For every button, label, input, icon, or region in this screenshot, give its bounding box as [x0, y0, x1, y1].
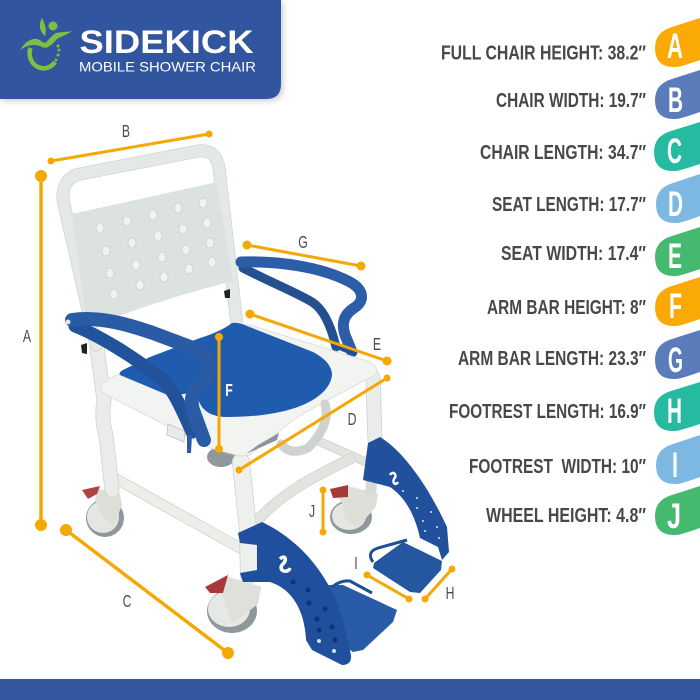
front caster [205, 575, 259, 633]
spec row H [449, 382, 700, 431]
dimension letters [23, 122, 454, 612]
rear seat wheel [207, 447, 235, 467]
seat bracket [167, 424, 185, 442]
dimension letters: C [123, 592, 131, 612]
spec row J: J [667, 497, 681, 536]
header banner [0, 0, 281, 99]
rear left caster [82, 486, 124, 537]
spec row E [501, 227, 700, 276]
footer bar [0, 679, 700, 700]
dimension lines [35, 130, 456, 659]
dimension letters: E [373, 335, 381, 355]
backrest holes [96, 198, 216, 299]
dimension D line [236, 374, 390, 474]
spec row B [496, 70, 700, 120]
dimension B line [48, 130, 212, 164]
spec row E: SEAT WIDTH: 17.4″ [501, 243, 646, 265]
rear foot support plate [363, 437, 449, 560]
white seat [101, 324, 377, 456]
spec row B: B [668, 81, 683, 120]
spec row H: H [667, 392, 682, 431]
spec row C: C [667, 132, 682, 171]
dimension J line [320, 486, 326, 536]
spec row A: A [667, 27, 683, 66]
spec row J: WHEEL HEIGHT: 4.8″ [486, 505, 646, 527]
spec row B: CHAIR WIDTH: 19.7″ [496, 90, 646, 112]
dimension letters: D [348, 410, 356, 430]
left armrest [66, 319, 209, 453]
front foot plate [325, 581, 397, 652]
dimension letters: G [298, 233, 308, 253]
spec row F: F [669, 287, 682, 326]
spec row G: G [668, 341, 683, 380]
spec row D [492, 174, 700, 224]
armrest clips [81, 289, 230, 354]
commode support tube [281, 404, 326, 451]
spec row C [480, 122, 700, 171]
blue seat cushion [120, 323, 332, 417]
spec row G [458, 330, 700, 380]
dimension E line [246, 310, 392, 366]
dimension F line [215, 333, 223, 453]
spec row D: D [668, 185, 683, 224]
spec row H: FOOTREST LENGTH: 16.9″ [449, 401, 646, 423]
dimension I line [364, 572, 412, 602]
dimension letters: F [225, 381, 233, 401]
dimension letters: H [446, 584, 454, 604]
front foot support plate [238, 522, 351, 665]
spec row D: SEAT LENGTH: 17.7″ [492, 194, 646, 216]
rear footplate [370, 540, 442, 593]
brand name: SIDEKICK [80, 24, 254, 60]
dimension C line [60, 524, 234, 659]
spec row C: CHAIR LENGTH: 34.7″ [480, 142, 646, 164]
brand subtitle: MOBILE SHOWER CHAIR [79, 58, 256, 74]
spec row F: ARM BAR HEIGHT: 8″ [487, 297, 646, 319]
spec row I [469, 435, 700, 485]
spec row A [441, 18, 700, 67]
dimension letters: A [23, 327, 32, 347]
chair illustration [63, 151, 449, 665]
spec row F [487, 277, 700, 326]
spec row I: I [672, 446, 678, 485]
dimension letters: I [354, 554, 358, 574]
dimension H line [422, 566, 456, 602]
dimension letters: J [309, 502, 315, 522]
backrest frame [63, 151, 237, 345]
right armrest [241, 262, 362, 353]
rear right caster [330, 485, 376, 534]
commode pan [246, 433, 279, 454]
spec row A: FULL CHAIR HEIGHT: 38.2″ [441, 42, 646, 64]
spec row G: ARM BAR LENGTH: 23.3″ [458, 348, 646, 370]
spec row J [486, 486, 700, 536]
spec row I: FOOTREST WIDTH: 10″ [469, 456, 646, 478]
spec row E: E [668, 237, 682, 276]
dimension A line [35, 170, 47, 531]
frame tubes [96, 340, 375, 575]
dimension G line [242, 240, 366, 270]
dimension letters: B [122, 122, 130, 142]
backrest panel [72, 182, 233, 318]
icon: logo figure on wheel [20, 18, 72, 68]
